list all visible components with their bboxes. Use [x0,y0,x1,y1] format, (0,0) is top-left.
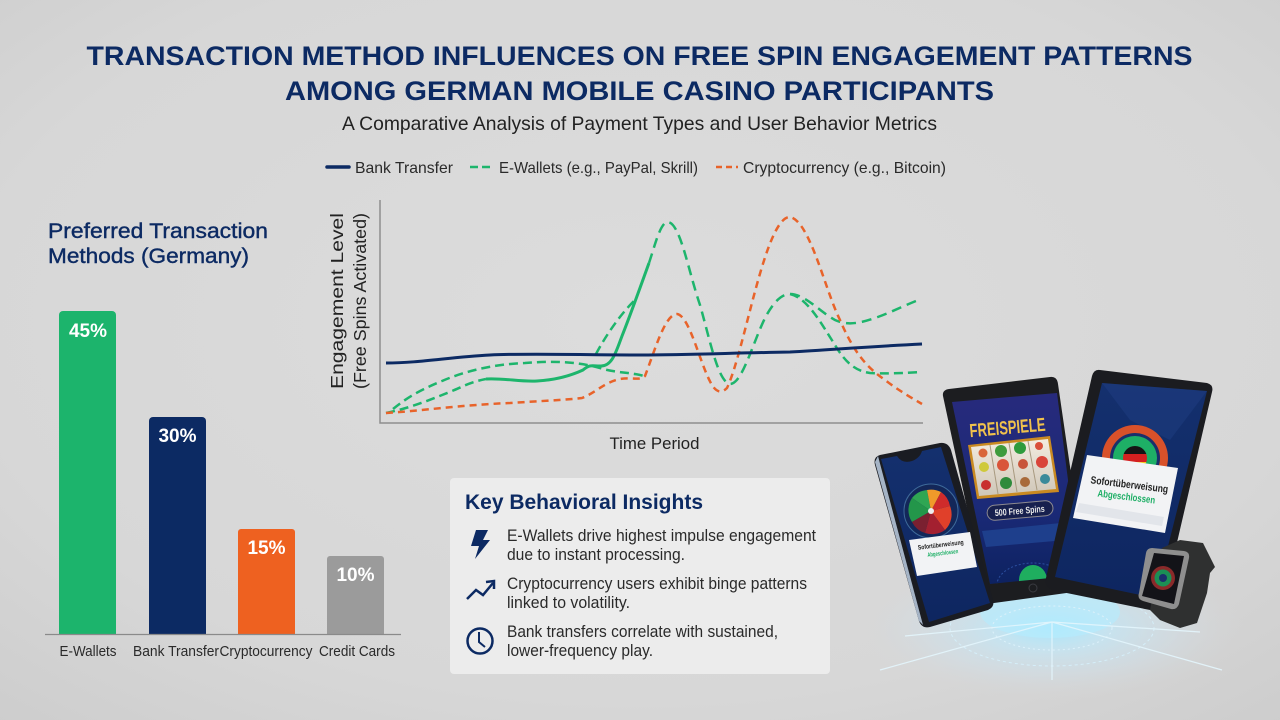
line: bank transfer [386,344,922,363]
free spins pill [987,500,1054,521]
line: cryptocurrency [386,217,922,413]
insight: e-wallets: due to instant processing. [507,546,685,564]
free spins pill: 500 Free Spins [994,504,1045,519]
bar labels: Bank Transfer [133,644,219,660]
heading: preferred transaction methods: Methods (Germany) [48,244,249,268]
insight: e-wallets [507,527,816,564]
confirmation card [909,532,977,576]
line: e-wallets branch dashed [596,298,637,354]
prize wheel [904,484,958,538]
holographic platform [855,556,1245,700]
insight: bank transfers [507,623,778,660]
confirmation card [1073,455,1178,533]
bar: bank transfer 30%: 30% [158,426,197,447]
line chart: engagement over time [327,200,923,453]
heading: preferred transaction methods [48,219,268,268]
insight: bank transfers: lower-frequency play. [507,642,653,660]
insight: cryptocurrency: Cryptocurrency users exhibit binge patterns [507,575,807,593]
line: e-wallets decline dashed [790,294,921,373]
bar labels: Credit Cards [319,644,395,660]
device: right tablet [1046,370,1212,611]
title [86,41,1192,106]
bar labels: Cryptocurrency [220,644,313,660]
y axis label: (Free Spins Activated) [350,213,370,389]
bar chart: preferred methods [45,311,401,660]
subtitle: A Comparative Analysis of Payment Types and User Behavior Metrics [342,113,937,135]
heading: preferred transaction methods: Preferred Transaction [48,219,268,243]
device: center tablet [942,376,1070,604]
slot machine [968,436,1059,499]
bar: credit cards 10%: 10% [336,565,375,586]
icon: lightning bolt [471,530,490,559]
confirmation card: Sofortüberweisung [1090,474,1169,496]
icon: trending arrow [467,581,494,599]
bar labels: E-Wallets [60,644,116,660]
title: AMONG GERMAN MOBILE CASINO PARTICIPANTS [285,76,994,106]
home button [1029,584,1037,592]
line: e-wallets peak dashed [649,222,921,384]
y axis label [327,213,370,389]
gauge with german flag [1102,425,1168,466]
bar labels [60,644,395,660]
freispiele heading: FREISPIELE [969,415,1046,442]
bar: cryptocurrency 15% [238,529,295,634]
device: phone [875,443,993,627]
legend: Cryptocurrency (e.g., Bitcoin) [743,160,946,177]
axes [380,200,923,423]
illustration: mobile devices [874,370,1222,680]
insight: cryptocurrency [507,575,807,612]
panel heading: Key Behavioral Insights [465,491,703,514]
icon: clock [468,628,492,654]
confirmation card: Abgeschlossen [927,549,959,559]
confirmation card: Sofortüberweisung [918,539,964,552]
insight: bank transfers: Bank transfers correlate with sustained, [507,623,778,641]
legend: E-Wallets (e.g., PayPal, Skrill) [499,160,698,177]
title: TRANSACTION METHOD INFLUENCES ON FREE SPIN ENGAGEMENT PATTERNS [86,41,1192,71]
line: e-wallets lower solid [486,263,649,381]
line: e-wallets lower dashed start [386,379,486,413]
bar: credit cards 10% [327,556,384,634]
legend: Bank Transfer [355,160,454,177]
panel: key behavioral insights [450,478,830,674]
bar: cryptocurrency 15%: 15% [247,538,286,559]
bar: e-wallets 45% [59,311,116,634]
button [982,523,1066,547]
x axis label: Time Period [610,434,700,453]
confirmation card: Abgeschlossen [1097,489,1156,507]
y axis label: Engagement Level [327,213,347,389]
legend [327,160,946,177]
bar: bank transfer 30% [149,417,206,634]
insight: cryptocurrency: linked to volatility. [507,594,630,612]
insight: e-wallets: E-Wallets drive highest impulse engagement [507,527,816,545]
device: smartwatch [1138,540,1215,628]
line: e-wallets upper dashed [393,362,644,409]
bar: e-wallets 45%: 45% [69,321,107,342]
